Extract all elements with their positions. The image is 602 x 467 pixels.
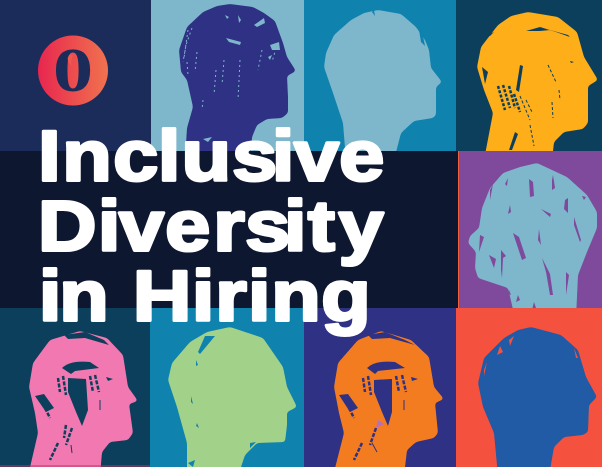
title: [38, 117, 384, 336]
title line: Diversity: Diversity: [38, 187, 384, 266]
panel: light blue head on teal: [303, 0, 456, 160]
panel: logo tile: [0, 0, 151, 151]
panel: green head on teal: [150, 308, 304, 467]
title line: Inclusive: Inclusive: [38, 117, 384, 196]
panel: orange head on navy: [303, 308, 456, 467]
panel: dark title band: [0, 151, 459, 308]
panel: light blue head on purple: [458, 151, 602, 318]
panel: blue head on coral: [456, 308, 602, 467]
icon: logo: [38, 36, 108, 106]
panel: yellow head on dark teal: [456, 0, 602, 160]
panel: pink head on dark teal: [0, 308, 150, 467]
icon: logo: 0: [53, 36, 93, 105]
panel: navy head on light blue: [151, 0, 304, 160]
title line: in Hiring: in Hiring: [39, 257, 371, 336]
